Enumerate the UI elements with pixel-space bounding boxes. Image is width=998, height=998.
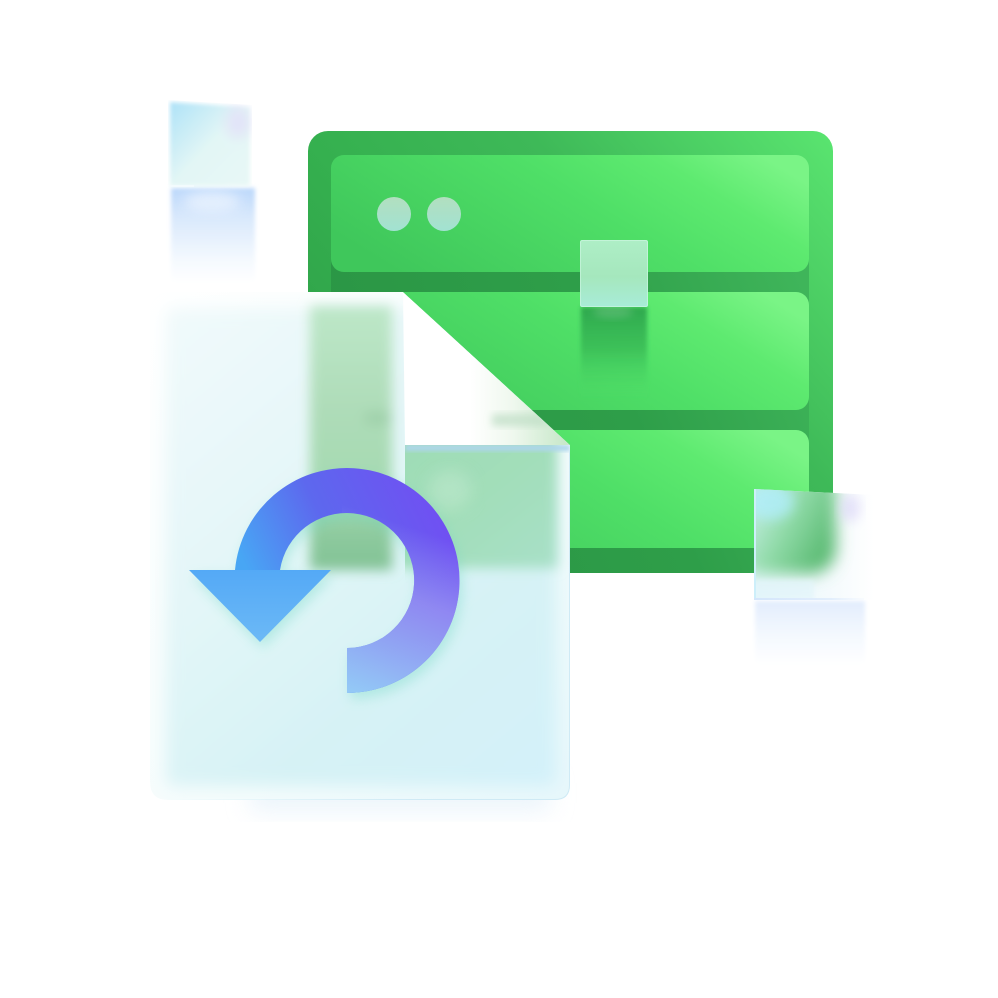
server body <box>308 131 833 573</box>
restore arc <box>235 468 460 693</box>
cube face <box>754 489 864 600</box>
cube face <box>580 240 648 307</box>
glass cube bottom right <box>754 489 866 643</box>
status lights <box>377 197 461 231</box>
frosted document fill <box>166 308 556 786</box>
server recess <box>331 255 809 573</box>
cube reflection <box>755 601 865 665</box>
document rim <box>150 292 570 800</box>
cube face <box>170 102 250 186</box>
arrow head <box>189 570 331 642</box>
server drawer: top <box>331 155 809 272</box>
server drawer: middle <box>331 292 809 410</box>
small glass cube on server <box>580 240 648 399</box>
blurred server seen through glass <box>310 306 392 570</box>
blurred server corner <box>756 489 848 584</box>
cube reflection <box>581 307 647 399</box>
arrow glow <box>192 474 463 699</box>
rear document panel <box>405 445 569 574</box>
panel: frosted glass document <box>150 292 570 800</box>
document fold <box>403 292 570 445</box>
icon: green server cabinet <box>308 131 833 573</box>
cube reflection <box>171 188 255 283</box>
server drawer: bottom <box>331 430 809 548</box>
glass cube top left <box>170 102 255 283</box>
icon: restore arrow <box>189 468 463 699</box>
soft document shadow <box>250 775 550 811</box>
document edge <box>227 445 570 800</box>
